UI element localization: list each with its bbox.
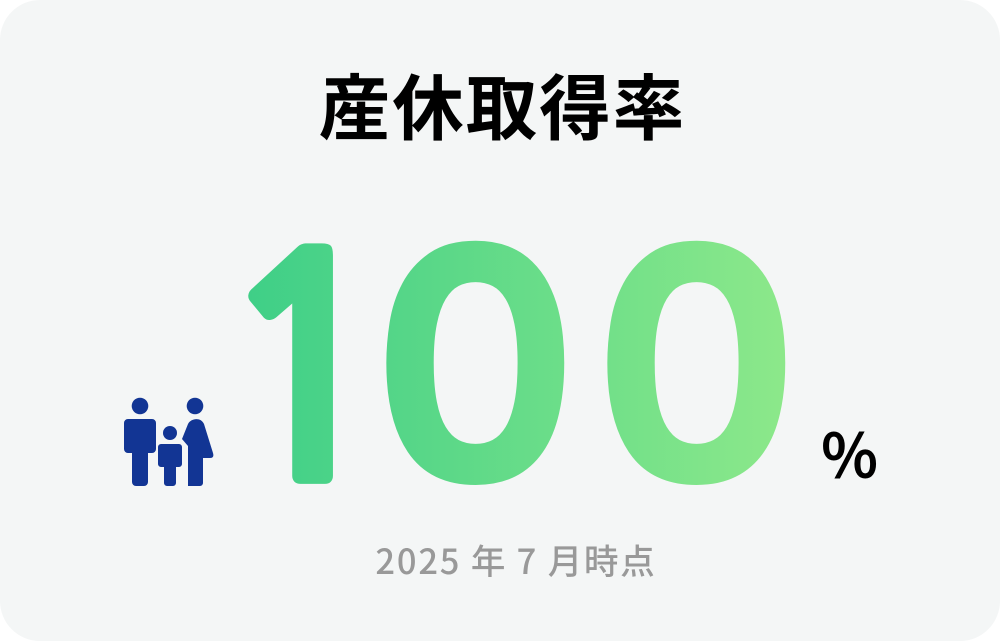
- icon: mother: [182, 398, 213, 486]
- icon: child: [158, 426, 182, 486]
- digit 1: 1: [213, 222, 398, 525]
- digit 0 second: 0: [593, 222, 798, 525]
- digit 0 first: 0: [372, 222, 577, 525]
- percent sign: %: [821, 408, 878, 495]
- title: 産休取得率: [319, 51, 686, 155]
- date note: 2025 年 7 月時点: [375, 534, 657, 584]
- icon: family: [124, 398, 213, 486]
- icon: father: [124, 398, 156, 486]
- big number 100: [213, 222, 798, 525]
